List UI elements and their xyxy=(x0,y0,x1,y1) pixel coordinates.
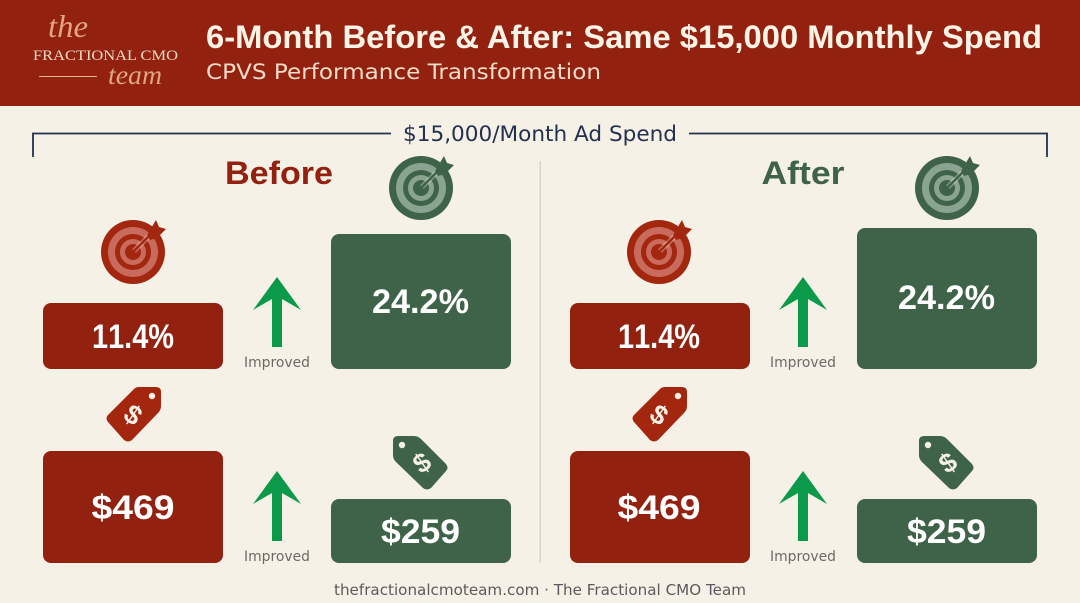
value: $469 box xyxy=(43,451,223,563)
arrow: improved: Improved xyxy=(244,355,310,371)
value: 24.2% box xyxy=(331,234,511,369)
icon: green price tag: $ xyxy=(407,446,437,480)
icon: green target xyxy=(389,156,454,220)
value: $259 box xyxy=(331,499,511,563)
value: $469 box xyxy=(570,451,750,563)
bracket: ad spend: $15,000/Month Ad Spend xyxy=(403,122,677,146)
footer: thefractionalcmoteam.com · The Fractional CMO Team xyxy=(334,581,746,599)
subtitle: CPVS Performance Transformation xyxy=(206,60,601,84)
arrow: improved xyxy=(244,277,310,371)
value: 24.2% box: 24.2% xyxy=(372,283,469,321)
logo: The Fractional CMO Team: FRACTIONAL CMO xyxy=(33,48,178,64)
icon: red target xyxy=(101,220,166,284)
icon: green price tag xyxy=(919,436,974,490)
heading: before: Before xyxy=(225,155,333,191)
arrow: improved: Improved xyxy=(770,355,836,371)
header banner xyxy=(0,0,1080,106)
value: 11.4% box xyxy=(43,303,223,369)
icon: red target xyxy=(627,220,692,284)
icon: red price tag: $ xyxy=(118,398,148,432)
icon: red price tag xyxy=(106,387,161,442)
title: 6-Month Before & After: Same $15,000 Monthly Spend xyxy=(206,19,1042,55)
bracket: ad spend xyxy=(33,122,1047,157)
value: $469 box: $469 xyxy=(618,489,700,527)
panel: before xyxy=(43,155,511,565)
arrow: improved xyxy=(244,471,310,565)
arrow: improved xyxy=(770,277,836,371)
icon: red price tag xyxy=(632,387,687,442)
value: 24.2% box: 24.2% xyxy=(898,279,995,317)
icon: green price tag: $ xyxy=(933,446,963,480)
arrow: improved: Improved xyxy=(244,549,310,565)
icon: red price tag: $ xyxy=(644,398,674,432)
value: 11.4% box: 11.4% xyxy=(92,318,174,356)
value: $259 box: $259 xyxy=(907,513,986,551)
logo: The Fractional CMO Team xyxy=(33,8,178,90)
logo: The Fractional CMO Team: team xyxy=(108,60,162,90)
value: 11.4% box: 11.4% xyxy=(618,318,700,356)
icon: green target xyxy=(915,156,980,220)
panel: after xyxy=(570,155,1037,565)
value: $259 box xyxy=(857,499,1037,563)
value: $259 box: $259 xyxy=(381,513,460,551)
value: 11.4% box xyxy=(570,303,750,369)
value: $469 box: $469 xyxy=(92,489,174,527)
logo: The Fractional CMO Team: the xyxy=(48,8,88,44)
value: 24.2% box xyxy=(857,228,1037,369)
heading: after: After xyxy=(762,155,844,191)
arrow: improved: Improved xyxy=(770,549,836,565)
arrow: improved xyxy=(770,471,836,565)
icon: green price tag xyxy=(393,436,448,490)
